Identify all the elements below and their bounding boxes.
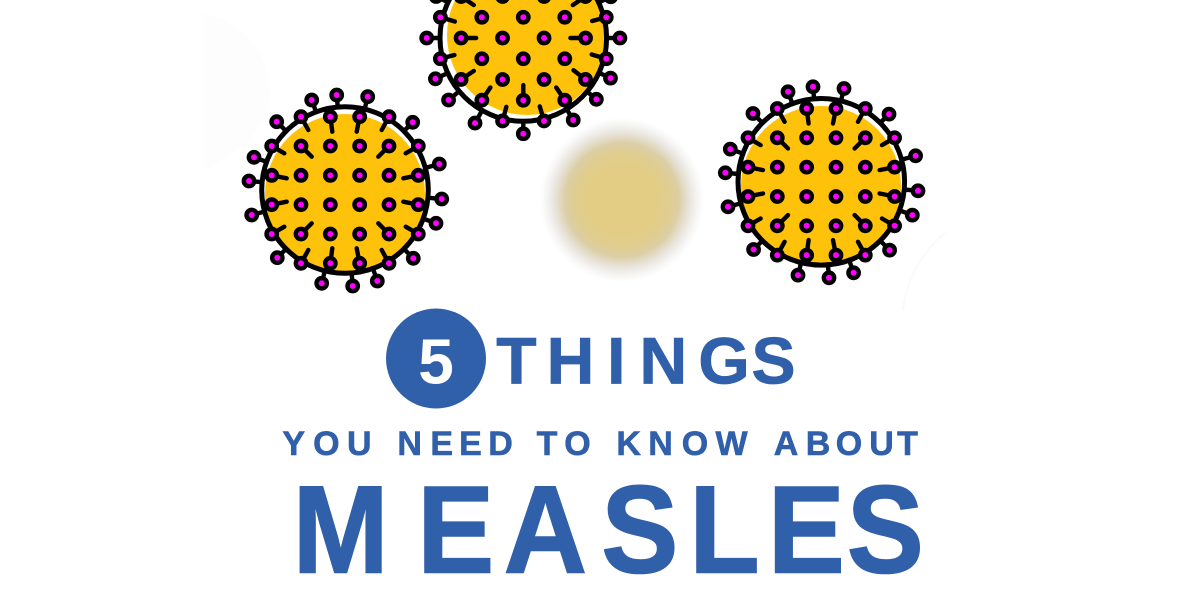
heading: MEASLES: MEASLES — [293, 462, 924, 599]
faint ghost arc: right — [903, 232, 945, 310]
faint ghost shape: left — [203, 14, 270, 170]
icon: virus right — [720, 82, 923, 283]
heading: THINGS: THINGS — [496, 324, 796, 398]
heading: YOU NEED TO KNOW ABOUT: YOU NEED TO KNOW ABOUT — [282, 425, 918, 463]
badge: number 5 — [386, 308, 486, 408]
blurred yellow virus — [540, 118, 704, 282]
icon: virus top — [380, 0, 666, 181]
badge: number 5: 5 — [418, 326, 454, 398]
icon: virus left — [244, 90, 447, 291]
